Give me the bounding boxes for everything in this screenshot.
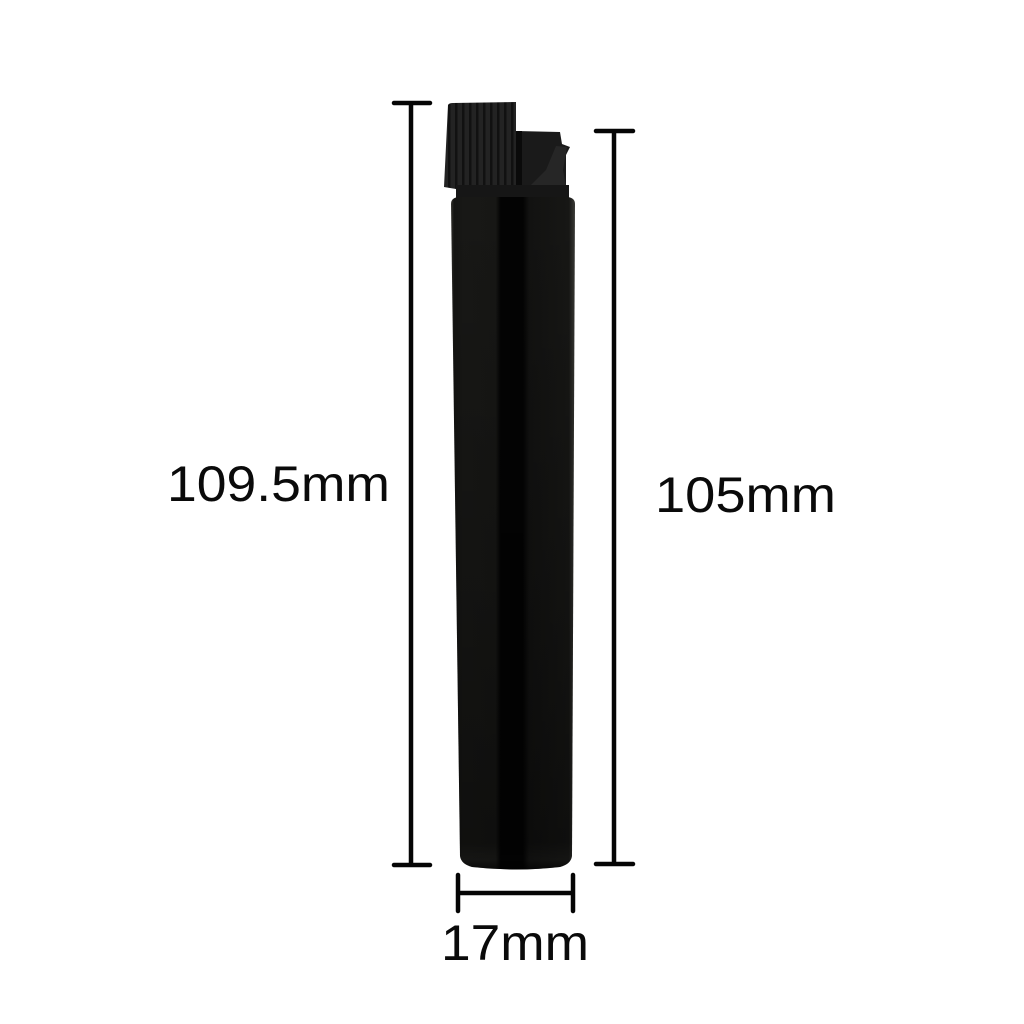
product: black tube bbox=[444, 102, 575, 870]
tube cap: ribbed lid bbox=[444, 102, 516, 189]
label: 105mm: 105mm bbox=[655, 467, 836, 523]
tube body bbox=[451, 197, 575, 870]
dimension: 109.5mm height bbox=[394, 103, 430, 865]
label: 109.5mm: 109.5mm bbox=[167, 456, 390, 512]
label: 17mm: 17mm bbox=[441, 915, 589, 971]
tube neck bbox=[456, 185, 569, 198]
dimension: 105mm height bbox=[596, 131, 633, 864]
tube cap: spout bbox=[516, 131, 570, 188]
dimension: 17mm width bbox=[458, 875, 573, 911]
